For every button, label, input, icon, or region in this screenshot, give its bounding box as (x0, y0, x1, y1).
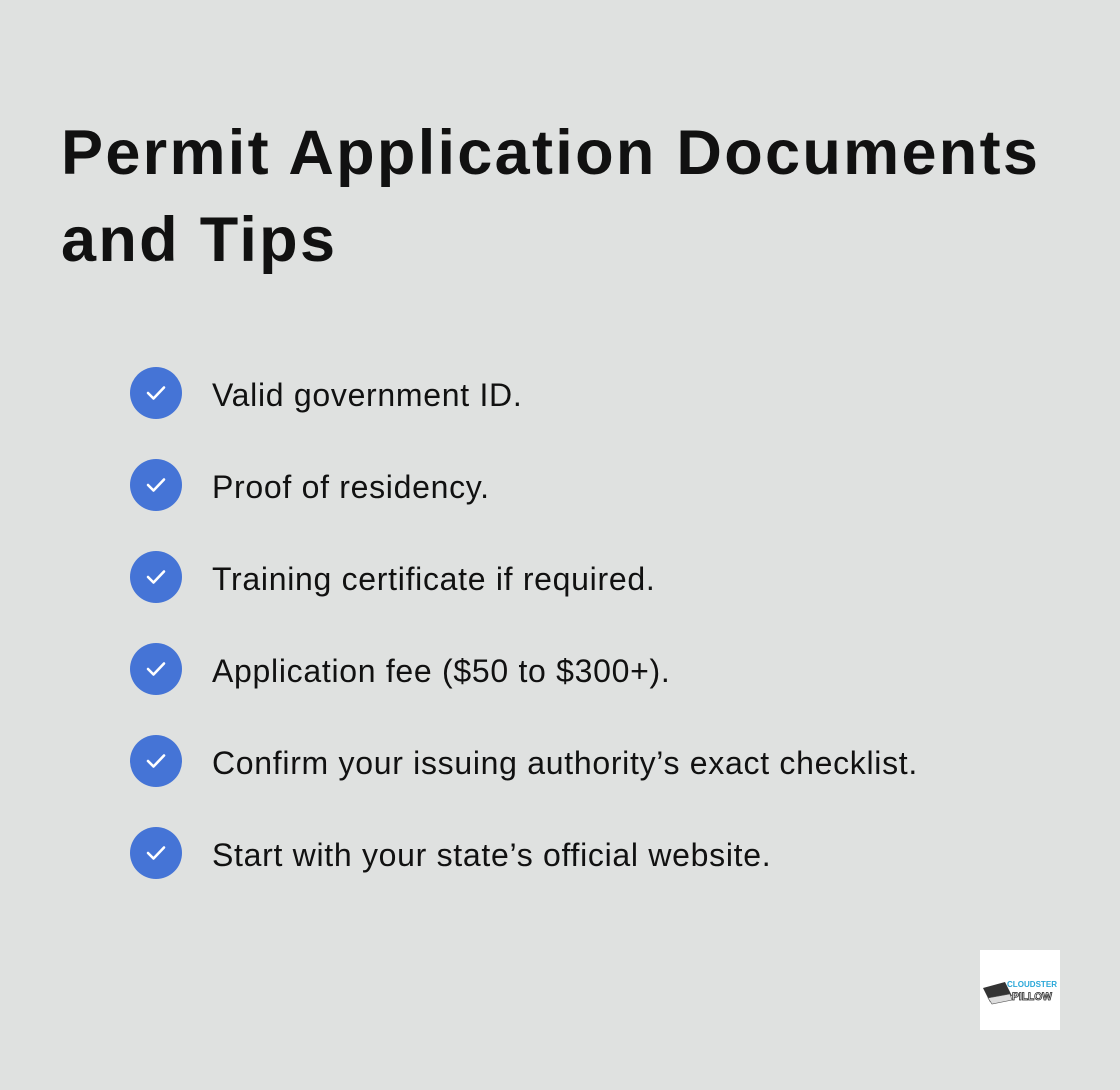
item 1: Valid government ID. (212, 377, 522, 413)
item 2: Proof of residency. (212, 469, 490, 505)
item 4 (130, 643, 670, 695)
item 4: Application fee ($50 to $300+). (212, 653, 670, 689)
item 5 (130, 735, 918, 787)
item 6 (130, 827, 771, 879)
logo (980, 950, 1060, 1030)
logo: PILLOW (1012, 991, 1053, 1003)
item 5: Confirm your issuing authority’s exact checklist. (212, 745, 918, 781)
item 3: Training certificate if required. (212, 561, 655, 597)
item 1 (130, 367, 522, 419)
item 2 (130, 459, 490, 511)
item 6: Start with your state’s official website. (212, 837, 771, 873)
item 3 (130, 551, 655, 603)
title: Permit Application Documents and Tips (61, 118, 1040, 275)
logo: CLOUDSTER (1007, 980, 1057, 989)
checklist (130, 367, 918, 879)
